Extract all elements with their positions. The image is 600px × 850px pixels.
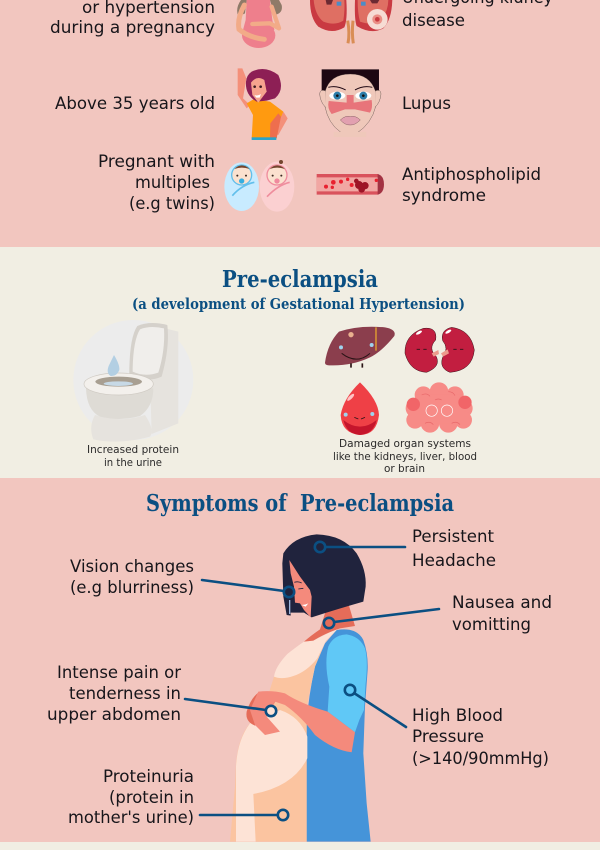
text: proteinuria: mother's urine) [68,808,194,827]
text: pregnant with multiples: (e.g twins) [129,194,215,213]
text: undergoing kidney disease: disease [402,11,465,30]
callout: nausea leader [324,609,439,628]
text: intense pain [47,663,181,724]
icon: face with lupus rash [320,69,381,137]
caption: increased protein: Increased protein [87,444,179,456]
text: intense pain: upper abdomen [47,705,181,724]
caption: damaged organ systems: like the kidneys, liver, blood [333,451,477,463]
text: proteinuria [68,767,194,827]
text: pregnant with multiples [98,152,215,213]
icon: sad kidneys [405,327,474,372]
icon: pregnant woman [237,0,282,48]
text: hypertension during a pregnancy [50,0,215,37]
text: pregnant with multiples: Pregnant with [98,152,215,171]
icon: sad blood drop [341,382,379,435]
illustration: pregnant woman in profile [230,534,371,842]
callout: blood pressure leader [345,685,406,727]
text: high blood pressure: (>140/90mmHg) [412,749,549,768]
text: high blood pressure: Pressure [412,727,484,746]
text: vision changes: (e.g blurriness) [70,578,194,597]
caption: damaged organ systems: or brain [384,463,425,475]
text: persistent headache: Headache [412,551,496,570]
text: nausea and vomitting: vomitting [452,615,531,634]
panel: symptoms of pre-eclampsia [0,478,600,842]
text: antiphospholipid syndrome: Antiphospholipid [402,165,541,184]
icon: blood vessel with clot [317,174,384,195]
text: proteinuria: (protein in [109,788,194,807]
text: nausea and vomitting: Nausea and [452,593,552,612]
icon: sad liver [325,327,395,368]
text: antiphospholipid syndrome: syndrome [402,186,486,205]
text: antiphospholipid syndrome [402,165,541,205]
panel: pre-eclampsia [0,247,600,478]
text: above 35 years old: Above 35 years old [55,94,215,113]
text: undergoing kidney disease [402,0,553,30]
icon: woman over 35 [238,68,288,140]
callout: abdomen leader [185,699,276,716]
caption: increased protein [87,444,179,469]
text: vision changes [70,557,194,597]
heading: symptoms: Symptoms of Pre-eclampsia [146,490,454,517]
text: intense pain: Intense pain or [57,663,181,682]
text: proteinuria: Proteinuria [103,767,194,786]
text: vision changes: Vision changes [70,557,194,576]
text: hypertension during a pregnancy: during a pregnancy [50,18,215,37]
text: high blood pressure: High Blood [412,706,503,725]
text: intense pain: tenderness in [69,684,181,703]
text: lupus: Lupus [402,94,451,113]
caption: increased protein: in the urine [104,457,162,469]
text: high blood pressure [412,706,549,768]
callout: proteinuria leader [200,810,288,820]
panel: risk factors [0,0,600,247]
icon: kidneys with disease [310,0,392,43]
icon: sad brain [406,382,473,433]
caption: damaged organ systems [333,438,477,475]
subheading: (a development of Gestational Hypertension) [132,295,465,313]
icon: toilet [73,320,193,442]
icon: twin babies [224,160,294,212]
callout: vision leader [202,580,294,597]
text: persistent headache: Persistent [412,527,495,546]
callout: headache leader [315,542,405,552]
text: nausea and vomitting [452,593,552,634]
text: persistent headache [412,527,496,570]
heading: pre-eclampsia: Pre-eclampsia [222,266,378,293]
panel: bottom strip [0,842,600,850]
text: pregnant with multiples: multiples [135,173,210,192]
caption: damaged organ systems: Damaged organ systems [339,438,471,450]
